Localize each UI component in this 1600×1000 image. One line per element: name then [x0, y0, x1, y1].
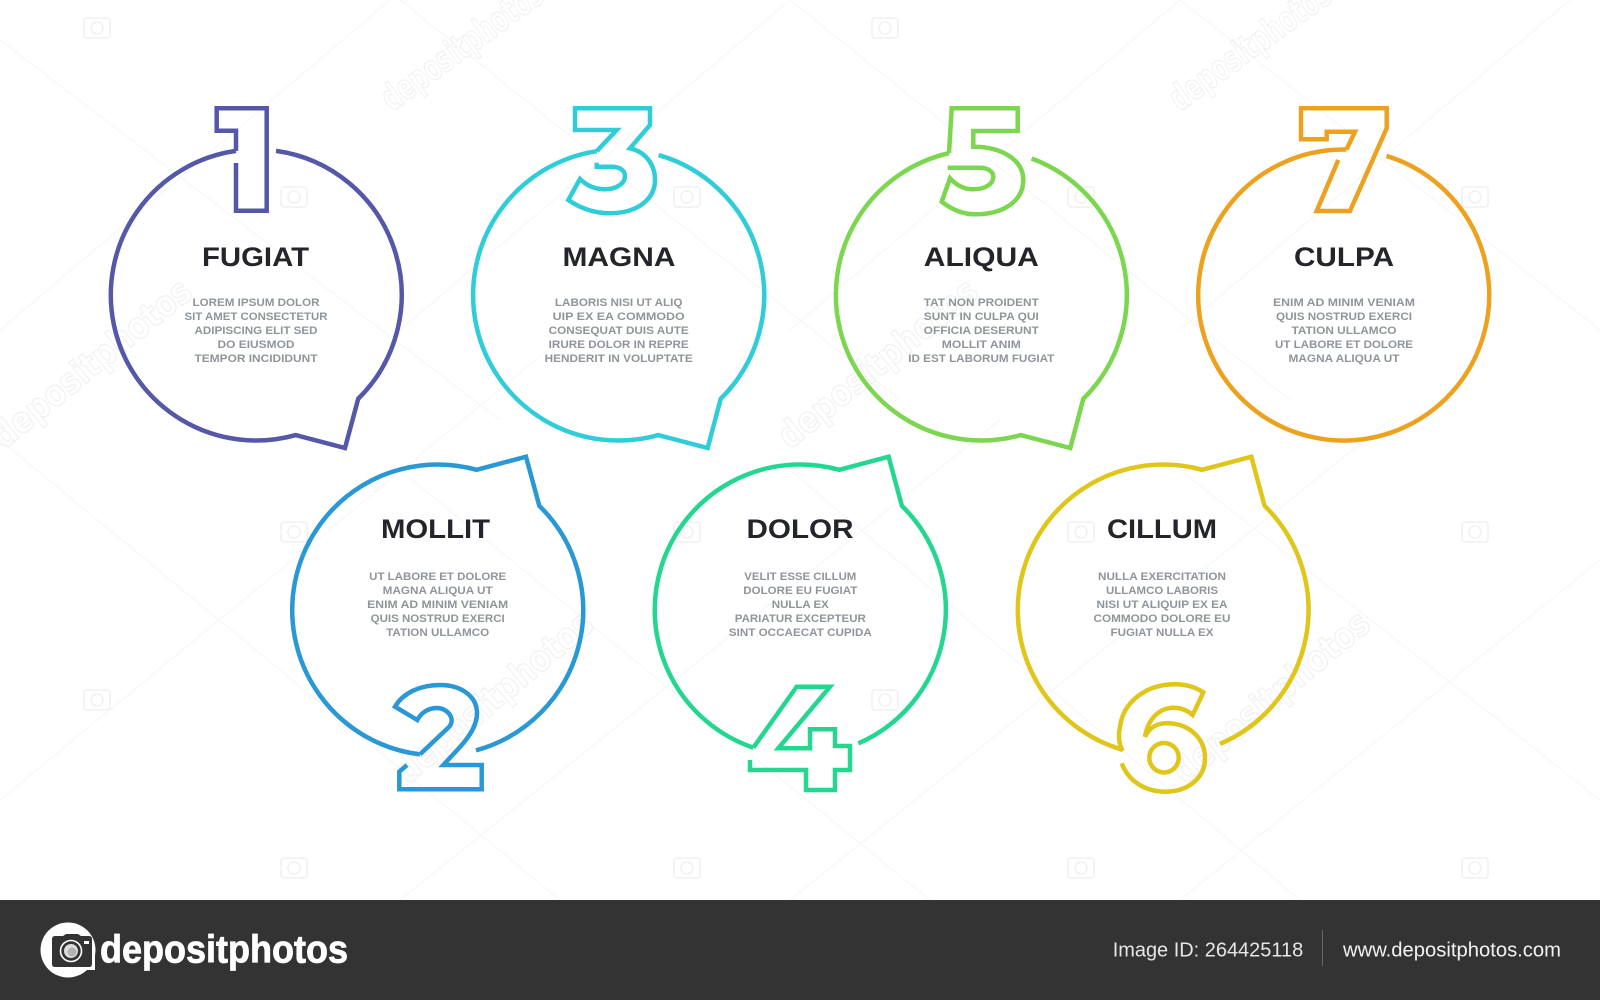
body text: step 6: [1094, 571, 1231, 639]
body text: step 7: MAGNA ALIQUA UT: [1288, 353, 1400, 365]
body text: step 4: SINT OCCAECAT CUPIDA: [729, 627, 872, 639]
icon: depositphotos camera logo: [40, 922, 96, 978]
body text: step 7: UT LABORE ET DOLORE: [1275, 339, 1413, 351]
panel: step 6 cillum: [1018, 457, 1308, 792]
number 6 outline: [1119, 684, 1205, 792]
heading: MAGNA: MAGNA: [562, 242, 676, 272]
body text: step 3: [545, 297, 693, 365]
panel: step 3 magna: [473, 108, 764, 448]
watermark: depositphotos text: [0, 0, 1378, 792]
heading: CILLUM: CILLUM: [1107, 514, 1217, 544]
body text: step 1: TEMPOR INCIDIDUNT: [194, 353, 318, 365]
watermark: depositphotos text: depositphotos: [387, 603, 601, 792]
number 4 outline: [750, 687, 850, 790]
number 1 outline: [217, 108, 267, 211]
number 2 outline: [395, 685, 482, 789]
body text: step 6: COMMODO DOLORE EU: [1094, 613, 1231, 625]
heading: MOLLIT: MOLLIT: [381, 514, 491, 544]
heading: CULPA: CULPA: [1294, 242, 1394, 272]
watermark: camera icons: [84, 18, 1488, 878]
speech bubble outline 2: [292, 457, 583, 754]
body text: step 6: FUGIAT NULLA EX: [1110, 627, 1214, 639]
body text: step 4: DOLORE EU FUGIAT: [743, 585, 858, 597]
speech bubble outline 3: [473, 151, 764, 448]
body text: step 3: CONSEQUAT DUIS AUTE: [549, 325, 689, 337]
body text: step 7: TATION ULLAMCO: [1292, 325, 1396, 337]
body text: step 6: ULLAMCO LABORIS: [1106, 585, 1218, 597]
body text: step 3: HENDERIT IN VOLUPTATE: [545, 353, 693, 365]
body text: step 1: [184, 297, 328, 365]
body text: step 6: NULLA EXERCITATION: [1098, 571, 1226, 583]
body text: step 6: NISI UT ALIQUIP EX EA: [1096, 599, 1228, 611]
panel: step 1 fugiat: [111, 108, 402, 448]
body text: step 4: VELIT ESSE CILLUM: [744, 571, 856, 583]
body text: step 2: ENIM AD MINIM VENIAM: [367, 599, 508, 611]
body text: step 1: DO EIUSMOD: [218, 339, 295, 351]
panel: step 5 aliqua: [836, 108, 1127, 448]
heading: ALIQUA: ALIQUA: [924, 242, 1039, 272]
body text: step 5: ID EST LABORUM FUGIAT: [908, 353, 1055, 365]
body text: step 2: MAGNA ALIQUA UT: [383, 585, 493, 597]
circle outline 7: [1198, 150, 1489, 441]
body text: step 7: QUIS NOSTRUD EXERCI: [1276, 311, 1412, 323]
panel: step 7 culpa: [1198, 108, 1489, 441]
body text: step 2: QUIS NOSTRUD EXERCI: [371, 613, 505, 625]
speech bubble outline 5: [836, 153, 1127, 448]
image id: Image ID: 264425118: [1113, 940, 1303, 962]
footer bar: [0, 900, 1600, 1000]
body text: step 7: [1273, 297, 1415, 365]
body text: step 4: [729, 571, 872, 639]
body text: step 1: SIT AMET CONSECTETUR: [184, 311, 328, 323]
body text: step 7: ENIM AD MINIM VENIAM: [1273, 297, 1415, 309]
body text: step 5: MOLLIT ANIM: [942, 339, 1021, 351]
body text: step 5: TAT NON PROIDENT: [924, 297, 1039, 309]
speech bubble outline 4: [655, 457, 946, 748]
heading: FUGIAT: FUGIAT: [202, 242, 310, 272]
body text: step 5: OFFICIA DESERUNT: [924, 325, 1039, 337]
speech bubble outline 6: [1018, 457, 1308, 750]
body text: step 3: IRURE DOLOR IN REPRE: [549, 339, 689, 351]
watermark: depositphotos text: depositphotos: [770, 271, 986, 457]
body text: step 5: [908, 297, 1055, 365]
body text: step 1: ADIPISCING ELIT SED: [194, 325, 318, 337]
body text: step 4: PARIATUR EXCEPTEUR: [735, 613, 866, 625]
body text: step 4: NULLA EX: [772, 599, 830, 611]
number 3 outline: [568, 108, 655, 213]
number 5 outline: [942, 108, 1023, 214]
body text: step 2: UT LABORE ET DOLORE: [369, 571, 506, 583]
body text: step 3: LABORIS NISI UT ALIQ: [555, 297, 682, 309]
heading: DOLOR: DOLOR: [746, 514, 854, 544]
website url: www.depositphotos.com: [1342, 940, 1561, 962]
body text: step 2: [367, 571, 508, 639]
body text: step 2: TATION ULLAMCO: [386, 627, 489, 639]
speech bubble outline 1: [111, 151, 402, 448]
panel: step 4 dolor: [655, 457, 946, 790]
number 7 outline: [1301, 108, 1387, 211]
body text: step 3: UIP EX EA COMMODO: [553, 311, 685, 323]
watermark: depositphotos text: depositphotos: [1164, 603, 1378, 792]
body text: step 1: LOREM IPSUM DOLOR: [192, 297, 320, 309]
logo wordmark: depositphotos: [100, 929, 348, 972]
body text: step 5: SUNT IN CULPA QUI: [924, 311, 1039, 323]
panel: step 2 mollit: [292, 457, 583, 789]
